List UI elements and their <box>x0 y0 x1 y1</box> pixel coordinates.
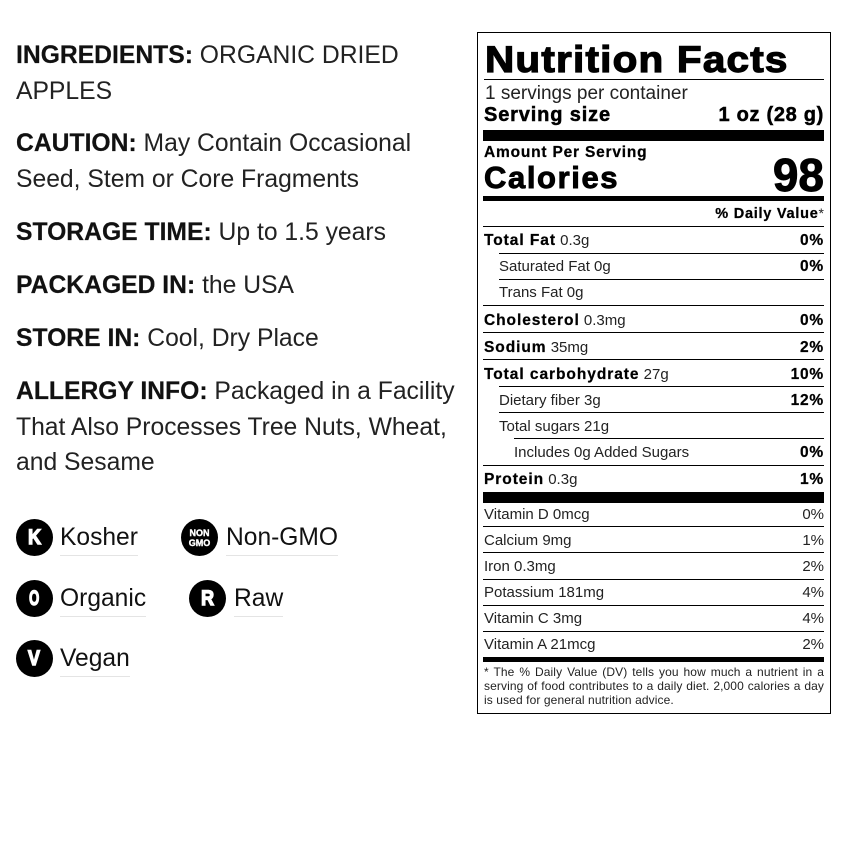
text block: allergy info: That Also Processes Tree Nuts, Wheat, <box>16 414 447 440</box>
text block: allergy info: and Sesame <box>16 449 155 476</box>
icon: non-GMO <box>181 519 218 556</box>
icon: kosher <box>16 519 53 556</box>
row: vitamin A: Vitamin A 21mcg <box>484 636 595 653</box>
row: serving size: Serving size <box>484 104 611 126</box>
row: sodium: 2% <box>800 339 824 356</box>
icon: organic: O <box>29 587 40 610</box>
text block: store in: STORE IN: Cool, Dry Place <box>16 325 319 352</box>
row: serving size: 1 oz (28 g) <box>718 104 824 126</box>
row: iron <box>484 558 824 575</box>
row: calcium: Calcium 9mg <box>484 532 572 549</box>
row: trans fat: Trans Fat 0g <box>499 284 583 301</box>
text block: caution <box>16 130 411 192</box>
text block: allergy info: ALLERGY INFO: Packaged in a Facility <box>16 378 455 405</box>
text block: storage time: STORAGE TIME: Up to 1.5 years <box>16 219 386 246</box>
row: potassium <box>484 584 824 601</box>
text block: packaged in: PACKAGED IN: the USA <box>16 272 294 299</box>
row: protein: Protein 0.3g <box>484 471 577 488</box>
row: saturated fat: 0% <box>800 258 824 275</box>
footnote: * The % Daily Value (DV) tells you how much a nutrient in a serving of food contributes to a daily diet. 2,000 calories a day is used for general nutrition advice. <box>484 665 824 707</box>
label: vegan: Vegan <box>60 645 130 672</box>
row: protein: 1% <box>800 471 824 488</box>
row: calories: Calories <box>484 160 619 195</box>
label: kosher: Kosher <box>60 524 138 551</box>
icon: kosher: K <box>28 526 41 549</box>
text: amount per serving: Amount Per Serving <box>484 144 647 161</box>
row: vitamin D: 0% <box>802 506 824 523</box>
label: raw: Raw <box>234 585 283 612</box>
row: total fat: Total Fat 0.3g <box>484 232 589 249</box>
row: sodium: Sodium 35mg <box>484 339 588 356</box>
text block: caution: CAUTION: May Contain Occasional <box>16 130 411 157</box>
row: potassium: Potassium 181mg <box>484 584 604 601</box>
text: servings per container: 1 servings per container <box>485 83 688 104</box>
row: added sugars: 0% <box>800 444 824 461</box>
text block: ingredients: APPLES <box>16 78 112 104</box>
row: vitamin C: Vitamin C 3mg <box>484 610 582 627</box>
row: vitamin A: 2% <box>802 636 824 653</box>
row: vitamin D <box>484 506 824 523</box>
text block: ingredients: INGREDIENTS: ORGANIC DRIED <box>16 42 399 69</box>
row: vitamin A <box>484 636 824 653</box>
row: cholesterol: Cholesterol 0.3mg <box>484 312 626 329</box>
row: iron: 2% <box>802 558 824 575</box>
text: percent daily value: % Daily Value* <box>715 205 824 222</box>
row: total fat: 0% <box>800 232 824 249</box>
text block: ingredients <box>16 42 399 104</box>
row: vitamin C <box>484 610 824 627</box>
text block: caution: Seed, Stem or Core Fragments <box>16 166 359 192</box>
icon: non-GMO: NON <box>190 528 210 538</box>
row: added sugars: Includes 0g Added Sugars <box>514 444 689 461</box>
text block: allergy info <box>16 378 455 476</box>
row: serving size <box>484 104 824 126</box>
row: protein <box>484 471 824 488</box>
heading: nutrition facts: Nutrition Facts <box>485 39 789 80</box>
row: iron: Iron 0.3mg <box>484 558 556 575</box>
row: vitamin C: 4% <box>802 610 824 627</box>
label: organic: Organic <box>60 585 146 612</box>
label: non-GMO: Non-GMO <box>226 524 338 551</box>
row: dietary fiber: 12% <box>791 392 824 409</box>
icon: non-GMO: GMO <box>189 538 210 548</box>
row: saturated fat <box>499 258 824 275</box>
row: vitamin D: Vitamin D 0mcg <box>484 506 590 523</box>
row: total sugars: Total sugars 21g <box>499 418 609 435</box>
row: calcium: 1% <box>802 532 824 549</box>
row: cholesterol <box>484 312 824 329</box>
row: total carbohydrate: 10% <box>791 366 824 383</box>
icon: organic <box>16 580 53 617</box>
row: calories <box>484 149 824 201</box>
row: calcium <box>484 532 824 549</box>
row: total carbohydrate <box>484 366 824 383</box>
row: calories: 98 <box>773 149 824 201</box>
row: dietary fiber <box>499 392 824 409</box>
icon: raw <box>189 580 226 617</box>
row: added sugars <box>514 444 824 461</box>
row: potassium: 4% <box>802 584 824 601</box>
row: saturated fat: Saturated Fat 0g <box>499 258 611 275</box>
row: total carbohydrate: Total carbohydrate 27g <box>484 366 669 383</box>
icon: vegan: V <box>29 647 40 670</box>
panel: nutrition facts <box>477 32 831 714</box>
row: total fat <box>484 232 824 249</box>
icon: raw: R <box>201 587 214 610</box>
icon: vegan <box>16 640 53 677</box>
row: cholesterol: 0% <box>800 312 824 329</box>
row: dietary fiber: Dietary fiber 3g <box>499 392 601 409</box>
row: sodium <box>484 339 824 356</box>
